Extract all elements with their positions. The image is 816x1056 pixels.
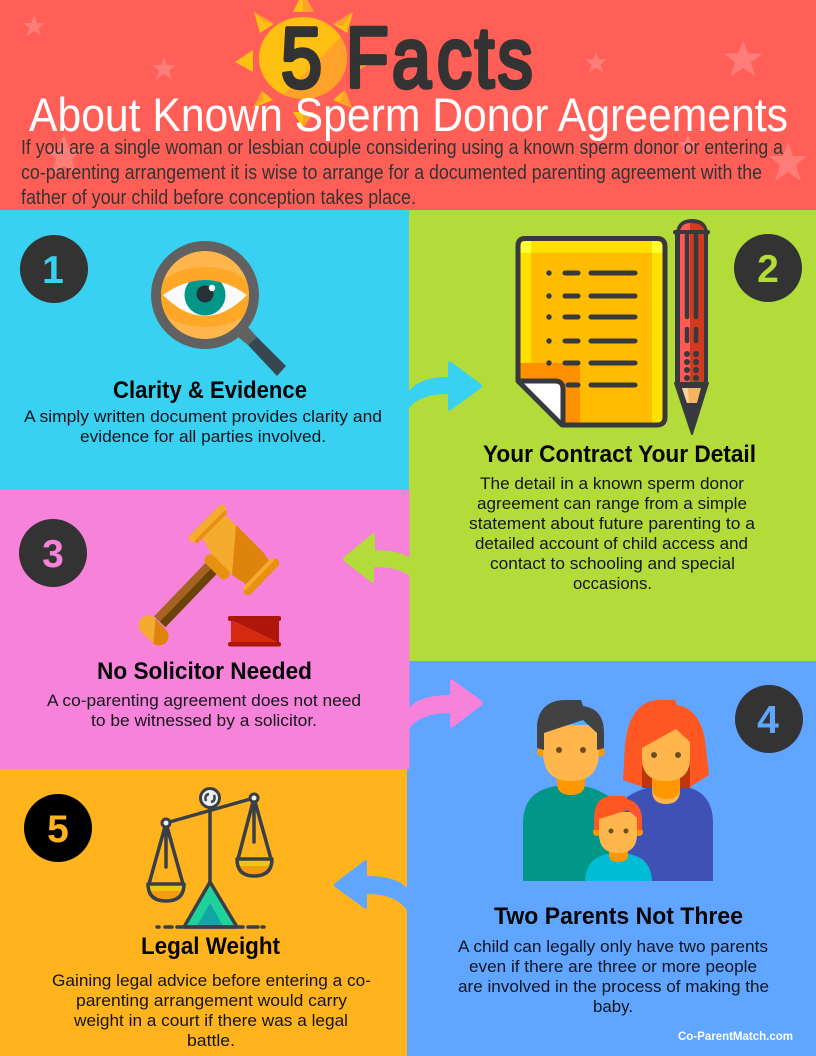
body text: to be witnessed by a solicitor.: [91, 712, 317, 730]
body text: detailed account of child access and: [475, 535, 748, 553]
body text: even if there are three or more people: [469, 958, 757, 976]
heading: Legal Weight: [141, 933, 280, 960]
body text: The detail in a known sperm donor: [480, 475, 745, 493]
icon: document: [518, 238, 665, 425]
body text: battle.: [187, 1032, 235, 1050]
body text: A simply written document provides clarity and: [24, 408, 382, 426]
body text: statement about future parenting to a: [469, 515, 756, 533]
body text: occasions.: [573, 575, 652, 593]
badge 4: [735, 685, 803, 753]
badge 1: [20, 235, 88, 303]
body text: A co-parenting agreement does not need: [47, 692, 361, 710]
body text: are involved in the process of making the: [458, 978, 769, 996]
arrow: 2 to 3: [343, 533, 410, 583]
heading: Two Parents Not Three: [494, 903, 743, 930]
panel: header: [0, 0, 816, 210]
body text: weight in a court if there was a legal: [73, 1012, 348, 1030]
body text: [24, 408, 382, 446]
heading: Your Contract Your Detail: [483, 441, 756, 468]
panel: fact 2 your contract your detail: [409, 210, 816, 661]
credit: Co-ParentMatch.com: [678, 1029, 793, 1043]
badge 4: 4: [757, 699, 779, 742]
badge 2: [734, 234, 802, 302]
body text: A child can legally only have two parents: [458, 938, 768, 956]
badge 5: [24, 794, 92, 862]
badge 2: 2: [757, 248, 779, 291]
body text: parenting arrangement would carry: [76, 992, 348, 1010]
icon: sun: [235, 0, 373, 128]
icon: gavel: [148, 509, 281, 646]
icon: pencil: [673, 219, 710, 434]
badge 3: 3: [42, 533, 64, 576]
background stars: [23, 15, 807, 181]
body text: evidence for all parties involved.: [80, 428, 326, 446]
body text: agreement can range from a simple: [477, 495, 747, 513]
intro paragraph: father of your child before conception takes place.: [21, 187, 416, 209]
icon: magnifying glass with eye: [151, 241, 286, 376]
body text: baby.: [593, 998, 633, 1016]
badge 5: 5: [47, 808, 69, 851]
badge 3: [19, 519, 87, 587]
panel: fact 5 legal weight: [0, 769, 407, 1056]
heading: No Solicitor Needed: [97, 658, 312, 685]
icon: family: [523, 700, 713, 881]
body text: [458, 938, 769, 1016]
panel: fact 3 no solicitor needed: [0, 490, 410, 769]
title: 5 Facts: Facts: [346, 12, 533, 106]
icon: scales of justice: [148, 788, 272, 927]
title: 5 Facts: 5: [281, 11, 322, 106]
heading: Clarity & Evidence: [113, 377, 307, 404]
arrow: 1 to 2: [409, 361, 482, 411]
badge 1: 1: [42, 249, 64, 292]
body text: Gaining legal advice before entering a co-: [52, 972, 371, 990]
body text: [52, 972, 371, 1050]
body text: [47, 692, 361, 730]
body text: [469, 475, 756, 593]
intro paragraph: [21, 137, 784, 209]
arrow: 4 to 5: [334, 860, 408, 912]
arrow: 3 to 4: [409, 679, 483, 729]
body text: contact to schooling and special: [490, 555, 735, 573]
panel: fact 4 two parents not three: [407, 661, 816, 1056]
panel: fact 1 clarity and evidence: [0, 210, 409, 490]
